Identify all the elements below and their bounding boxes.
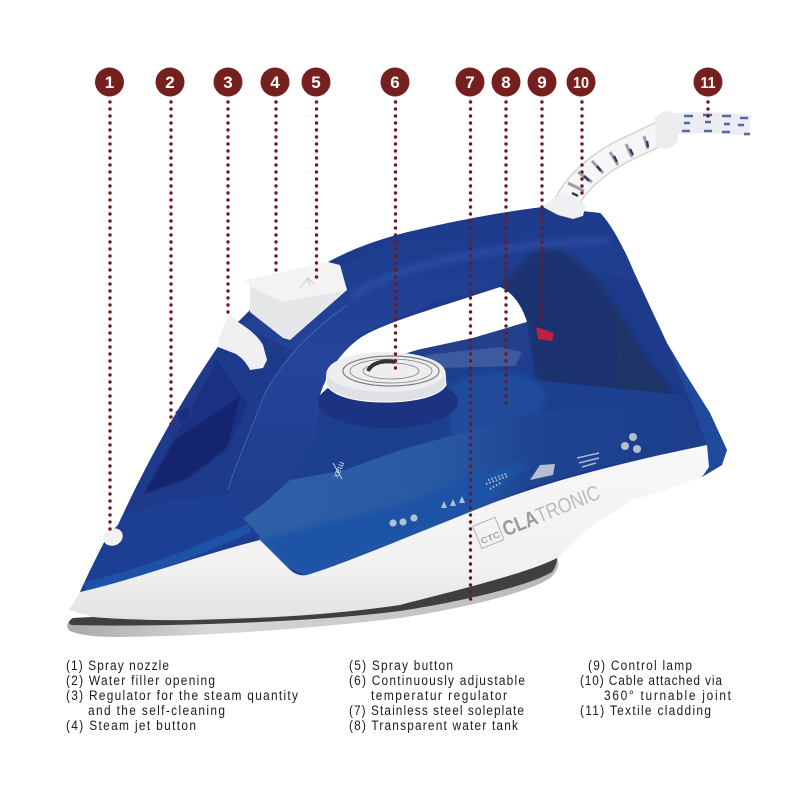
- handle front edge: [228, 305, 347, 490]
- number badges: 3: [223, 73, 233, 92]
- number badges: 5: [311, 73, 321, 92]
- dial markings: [343, 356, 439, 386]
- temperature regulator dial: [326, 352, 446, 402]
- dial base bowl: [318, 376, 458, 428]
- rear shaded area: [500, 250, 680, 400]
- number badges: 7: [465, 73, 475, 92]
- number badges: 6: [390, 73, 400, 92]
- legend column 3: [580, 657, 731, 718]
- legend column 3: (11) Textile cladding: [580, 702, 711, 718]
- stainless steel soleplate: [67, 558, 558, 637]
- legend column 2: (8) Transparent water tank: [349, 717, 518, 733]
- iron illustration: [67, 111, 750, 637]
- number badges: 2: [165, 73, 175, 92]
- leader lines: [110, 102, 708, 602]
- tank highlight: [425, 347, 522, 368]
- steam quantity regulator: [218, 313, 267, 370]
- legend column 1: (3) Regulator for the steam quantity: [66, 687, 298, 703]
- rear edge trim: [667, 343, 727, 477]
- legend column 1: (4) Steam jet button: [66, 717, 196, 733]
- water filler window: [143, 360, 248, 495]
- bright lower band: [262, 462, 530, 575]
- number badges: 1: [105, 73, 114, 92]
- top of water tank: [417, 322, 530, 368]
- body shell: [80, 207, 727, 600]
- legend column 3: (10) Cable attached via: [580, 672, 723, 688]
- legend: [66, 657, 731, 733]
- swivel cable joint: [543, 194, 586, 219]
- mid band: [243, 400, 707, 575]
- control lamp: [536, 327, 554, 341]
- brand logo: CLATRONIC: [499, 481, 603, 541]
- legend column 1: [66, 657, 298, 733]
- legend column 2: temperatur regulator: [371, 687, 508, 703]
- cable strain relief: [558, 111, 678, 205]
- number badges: 11: [700, 75, 716, 92]
- handle: [242, 211, 638, 434]
- number badges: [95, 68, 722, 96]
- nose lower: [80, 516, 260, 592]
- number badges: 10: [573, 75, 589, 92]
- water filler cap: [176, 405, 192, 425]
- water tank: [528, 346, 680, 405]
- number badges: 4: [270, 73, 280, 92]
- setting icons: [389, 433, 641, 527]
- window inner shade: [145, 397, 240, 493]
- legend column 1: (2) Water filler opening: [66, 672, 215, 688]
- legend column 3: 360° turnable joint: [604, 687, 731, 703]
- number badges: 9: [537, 73, 547, 92]
- legend column 2: (6) Continuously adjustable: [349, 672, 525, 688]
- legend column 1: (1) Spray nozzle: [66, 657, 169, 673]
- max marking: max: [331, 460, 347, 480]
- brand logo: CTC: [479, 529, 501, 546]
- legend column 3: (9) Control lamp: [588, 657, 692, 673]
- steam jet and spray buttons: [245, 262, 347, 340]
- tank window: [450, 372, 547, 438]
- white base: [69, 445, 709, 620]
- legend column 2: (7) Stainless steel soleplate: [349, 702, 524, 718]
- number badges: 8: [501, 73, 511, 92]
- brand logo: [473, 478, 603, 551]
- legend column 2: [349, 657, 525, 733]
- opening under handle: [320, 287, 527, 395]
- legend column 2: (5) Spray button: [349, 657, 453, 673]
- legend column 1: and the self-cleaning: [88, 702, 225, 718]
- shell shading: [70, 205, 727, 600]
- power cable with textile cladding: [672, 115, 750, 134]
- spray nozzle: [100, 525, 126, 549]
